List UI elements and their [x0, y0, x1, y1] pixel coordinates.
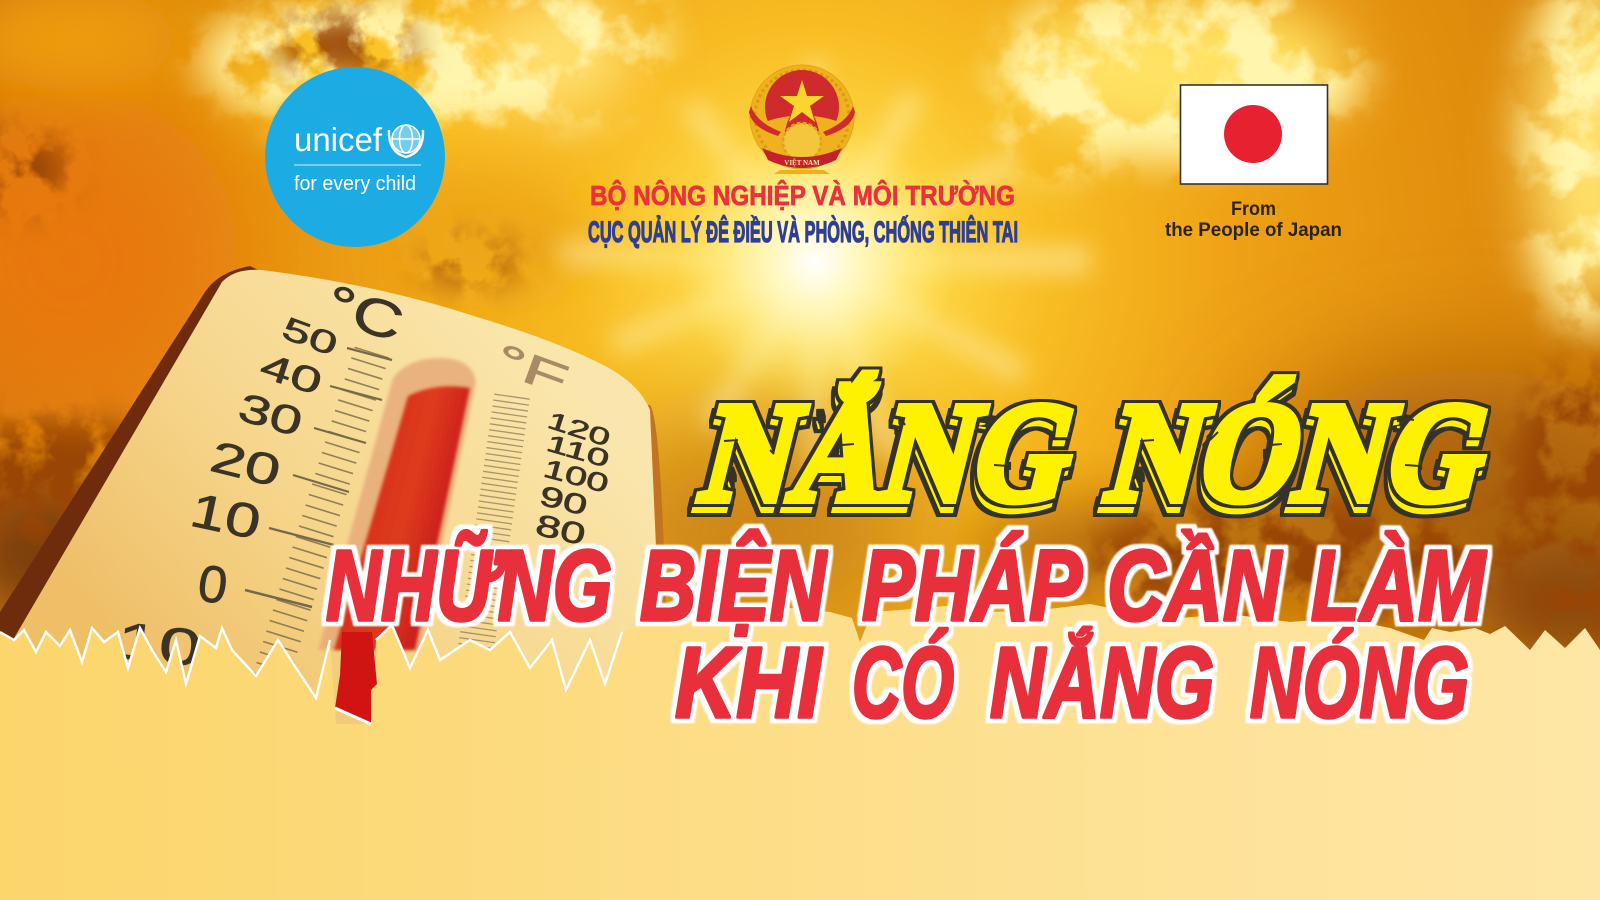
logo: national emblem of Viet Nam — [749, 65, 855, 174]
glass tube — [318, 358, 476, 650]
thermometer casing edge — [0, 266, 262, 640]
title: NẮNG NÓNG — [688, 373, 1507, 532]
thermometer — [0, 266, 668, 730]
subtitle: NHỮNG BIỆN PHÁP CẦN LÀM: BIỆN — [640, 530, 827, 642]
Fahrenheit scale numbers — [489, 334, 613, 552]
logo: Japan flag — [1180, 85, 1328, 184]
mercury drip — [335, 632, 377, 724]
subtitle: KHI CÓ NẮNG NÓNG: NẮNG — [990, 626, 1214, 739]
Celsius scale numbers — [89, 274, 410, 678]
text: From the People of Japan: From — [1231, 199, 1276, 220]
Fahrenheit scale numbers: °F — [489, 334, 575, 404]
icon: UNICEF globe — [389, 125, 423, 157]
Celsius scale numbers: 20 — [206, 432, 285, 497]
torn paper bottom panel — [0, 604, 1600, 900]
logo: UNICEF: for every child — [294, 173, 416, 195]
sun rays — [560, 60, 1090, 470]
Fahrenheit scale numbers: 80 — [532, 509, 589, 552]
subtitle: KHI CÓ NẮNG NÓNG — [675, 626, 1469, 739]
text: From the People of Japan — [1165, 199, 1342, 241]
thermometer card — [13, 270, 664, 730]
Fahrenheit scale ticks — [470, 396, 512, 690]
Celsius scale numbers: 0 — [194, 554, 231, 616]
torn edge highlight — [0, 625, 622, 698]
subtitle: NHỮNG BIỆN PHÁP CẦN LÀM: LÀM — [1311, 530, 1487, 642]
logo: national emblem of Viet Nam: VIỆT NAM — [784, 159, 820, 167]
logo: UNICEF — [265, 67, 445, 247]
subtitle: KHI CÓ NẮNG NÓNG: KHI — [675, 627, 823, 739]
Fahrenheit scale numbers: 120 — [544, 407, 613, 452]
Fahrenheit scale numbers: 110 — [543, 430, 612, 473]
gear — [783, 123, 821, 161]
Celsius scale numbers: 50 — [278, 310, 343, 363]
Celsius scale numbers: °C — [318, 274, 410, 354]
cloud highlights — [200, 0, 1600, 330]
heading: ministry name: BỘ NÔNG NGHIỆP VÀ MÔI TRƯỜNG — [590, 179, 1015, 211]
subtitle: KHI CÓ NẮNG NÓNG: CÓ — [852, 627, 954, 739]
title distress specks — [724, 412, 1419, 479]
Celsius scale numbers: 40 — [256, 345, 327, 403]
Celsius scale numbers: 10 — [186, 484, 265, 550]
banner — [749, 106, 855, 136]
mercury column — [334, 386, 470, 650]
subtitle: NHỮNG BIỆN PHÁP CẦN LÀM: PHÁP — [862, 530, 1082, 642]
heading: department name: CỤC QUẢN LÝ ĐÊ ĐIỀU VÀ PHÒNG, CHỐNG THIÊN TAI — [588, 215, 1018, 249]
cloud bodies — [220, 0, 1600, 310]
Fahrenheit scale numbers: 90 — [537, 480, 591, 521]
text: From the People of Japan: the People of Japan — [1165, 220, 1342, 241]
cloud shadows — [0, 15, 1600, 630]
Celsius scale numbers: 30 — [234, 385, 307, 445]
Fahrenheit scale numbers: 100 — [540, 453, 612, 499]
Celsius scale numbers: -10 — [89, 609, 204, 678]
emblem wheat sides — [764, 116, 840, 150]
subtitle: NHỮNG BIỆN PHÁP CẦN LÀM: CẦN — [1107, 530, 1282, 642]
title: NẮNG NÓNG: NẮNG — [688, 373, 1094, 532]
Celsius scale ticks — [245, 348, 392, 680]
logo: UNICEF: unicef — [294, 121, 383, 158]
subtitle: NHỮNG BIỆN PHÁP CẦN LÀM — [326, 530, 1487, 642]
subtitle: NHỮNG BIỆN PHÁP CẦN LÀM: NHỮNG — [326, 530, 612, 642]
subtitle: KHI CÓ NẮNG NÓNG: NÓNG — [1250, 627, 1469, 739]
title: NẮNG NÓNG: NÓNG — [1094, 375, 1507, 532]
